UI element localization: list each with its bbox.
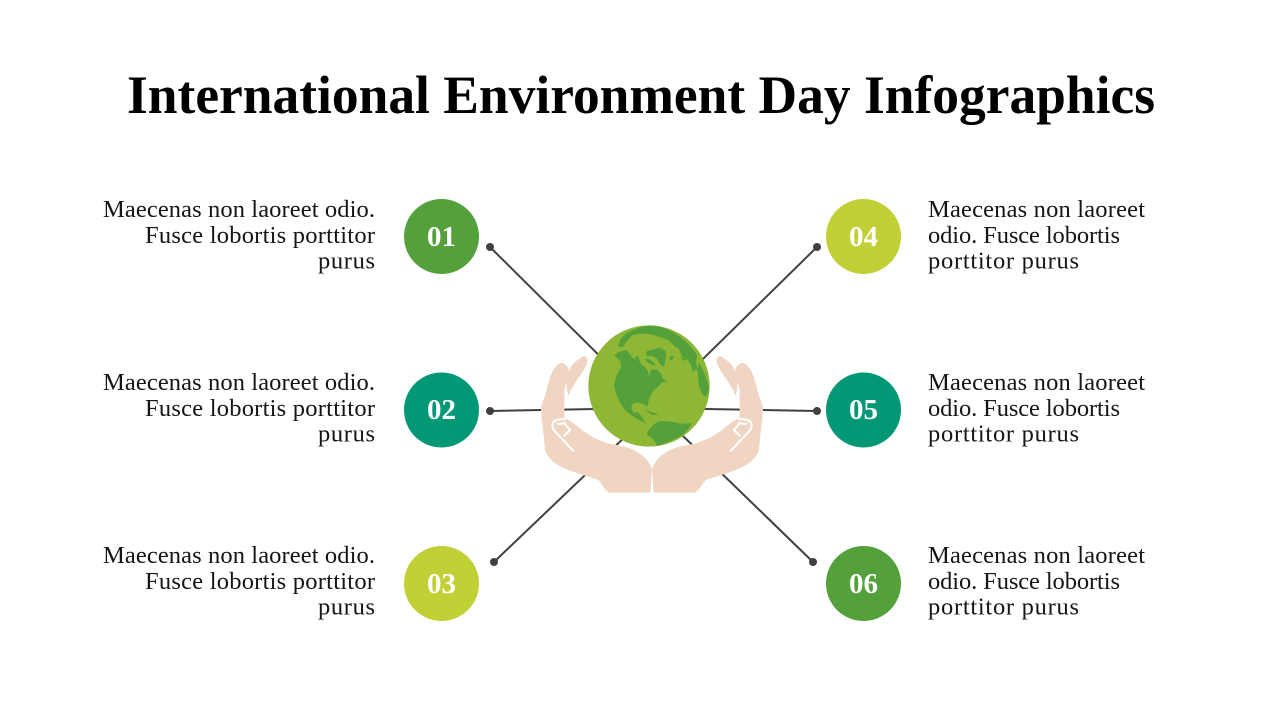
icon: hands [541, 356, 763, 493]
badge 04 [826, 199, 901, 274]
text block 01: purus [318, 248, 375, 274]
text block 03: purus [318, 594, 375, 620]
left hand [541, 356, 652, 493]
right hand [652, 356, 763, 493]
text block 01: Maecenas non laoreet odio. [103, 196, 375, 223]
text block 01: Fusce lobortis porttitor [145, 222, 375, 249]
text block 05: odio. Fusce lobortis [928, 395, 1120, 422]
icon: globe [588, 325, 710, 447]
text block 04: porttitor purus [928, 248, 1079, 274]
icon: hands holding globe [541, 325, 763, 493]
badge 06 [826, 546, 901, 621]
text block 04: odio. Fusce lobortis [928, 222, 1120, 249]
badge 01: 01 [427, 221, 456, 253]
badge 04: 04 [849, 221, 878, 253]
text block 02: Fusce lobortis porttitor [145, 395, 375, 422]
badge 01 [404, 199, 479, 274]
badge 03: 03 [427, 568, 456, 600]
badge 05 [826, 372, 901, 448]
text block 05 [928, 369, 1145, 448]
connector lines [486, 243, 821, 566]
text block 06: Maecenas non laoreet [928, 542, 1145, 569]
badge 05: 05 [849, 394, 878, 426]
text block 04: Maecenas non laoreet [928, 196, 1145, 223]
text block 02 [103, 369, 375, 448]
text block 06 [928, 542, 1145, 620]
text block 05: porttitor purus [928, 420, 1079, 448]
connector 03 [490, 414, 649, 566]
connector 05 [649, 407, 821, 415]
text block 02: Maecenas non laoreet odio. [103, 369, 375, 396]
text block 05: Maecenas non laoreet [928, 369, 1145, 396]
badge 03 [404, 546, 479, 621]
text block 06: odio. Fusce lobortis [928, 568, 1120, 595]
title: International Environment Day Infographics [127, 65, 1155, 125]
badge 02: 02 [427, 394, 456, 426]
connector 02 [486, 407, 649, 415]
connector 06 [649, 403, 817, 566]
badge 06: 06 [849, 568, 878, 600]
text block 02: purus [318, 420, 375, 448]
badge 02 [404, 372, 479, 448]
text block 01 [103, 196, 375, 274]
text block 03: Fusce lobortis porttitor [145, 568, 375, 595]
connector 01 [486, 243, 649, 405]
text block 04 [928, 196, 1145, 274]
connector 04 [649, 243, 821, 412]
text block 03 [103, 542, 375, 620]
text block 03: Maecenas non laoreet odio. [103, 542, 375, 569]
text block 06: porttitor purus [928, 594, 1079, 620]
